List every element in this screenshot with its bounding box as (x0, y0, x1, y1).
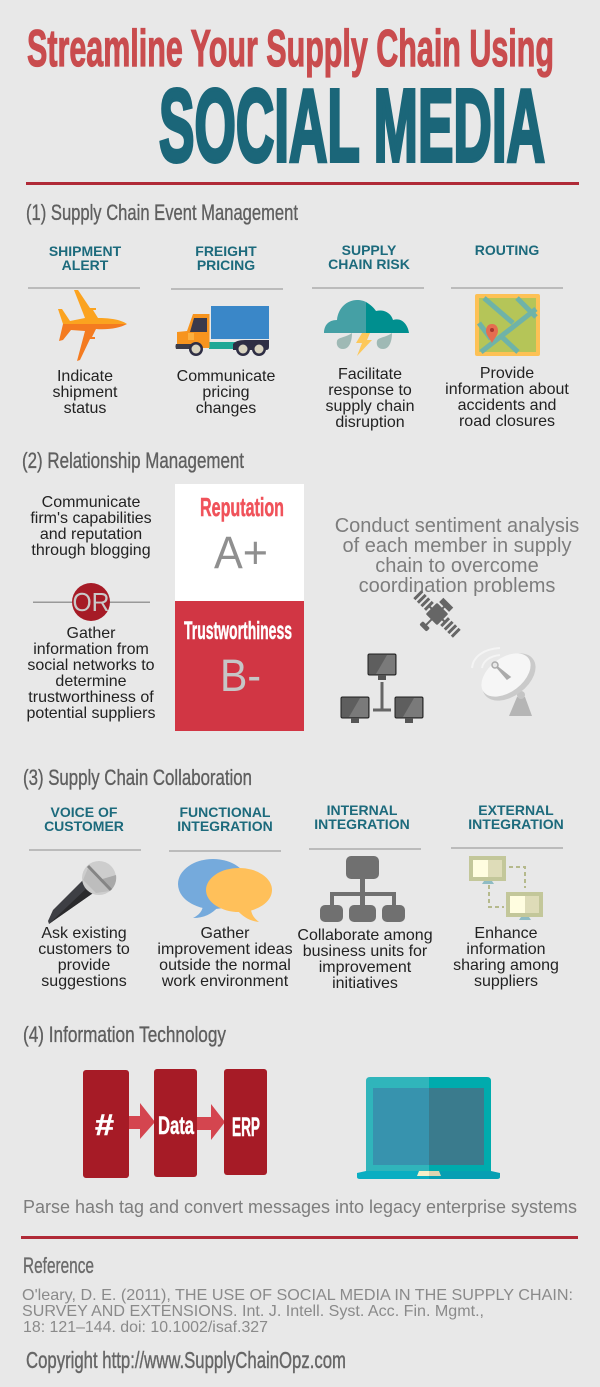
panel: routing: road closures (459, 413, 555, 430)
text block: social networks: determine (55, 673, 127, 690)
panel: internal integration: initiatives (332, 975, 398, 992)
text block: sentiment analysis (335, 515, 579, 597)
panel: internal integration: Collaborate among (297, 927, 433, 944)
text block: social networks: social networks to (27, 657, 155, 674)
panel: shipment alert: Indicate (57, 368, 113, 385)
icon: satellite (403, 583, 468, 648)
panel: shipment alert: ALERT (62, 257, 109, 273)
panel: freight pricing: pricing (202, 384, 250, 401)
panel: voice of customer: CUSTOMER (44, 818, 124, 834)
reference heading: Reference (23, 1253, 94, 1278)
text block: sentiment analysis: of each member in supply (342, 535, 572, 557)
panel: internal integration: improvement (319, 959, 412, 976)
OR divider: OR (72, 587, 110, 617)
panel: external integration: Enhance (474, 925, 538, 942)
text block: parse hash tag: Parse hash tag and convert messages into legacy enterprise systems (23, 1197, 577, 1217)
panel: routing: ROUTING (475, 242, 539, 258)
reference text: SURVEY AND EXTENSIONS. Int. J. Intell. Syst. Acc. Fin. Mgmt., (22, 1303, 484, 1320)
OR divider (33, 583, 150, 621)
text block: blogging: and reputation (40, 526, 142, 543)
text block: sentiment analysis: coordination problems (359, 575, 555, 597)
reference text: O'leary, D. E. (2011), THE USE OF SOCIAL MEDIA IN THE SUPPLY CHAIN: (22, 1287, 573, 1304)
icon: truck (176, 306, 269, 356)
panel: freight pricing (171, 243, 283, 417)
panel: routing: Provide (480, 365, 534, 382)
panel: external integration: information (466, 941, 546, 958)
text block: social networks: information from (33, 641, 149, 658)
panel: functional integration: outside the normal (159, 957, 291, 974)
panel: reputation: A+ (214, 527, 268, 578)
panel: internal integration: INTEGRATION (314, 816, 410, 832)
panel: shipment alert: status (64, 400, 106, 417)
text block: sentiment analysis: Conduct sentiment analysis (335, 515, 579, 537)
flow diagram: hash tag to ERP: Data (158, 1112, 195, 1140)
panel: freight pricing: PRICING (197, 257, 255, 273)
text block: blogging: through blogging (31, 542, 151, 559)
panel: voice of customer: suggestions (41, 973, 127, 990)
panel: functional integration: improvement ideas (157, 941, 293, 958)
flow diagram: hash tag to ERP: # (95, 1109, 114, 1142)
text block: blogging (30, 494, 152, 559)
panel: functional integration: Gather (201, 925, 250, 942)
arrow: hash to data (129, 1103, 155, 1139)
flow diagram: hash tag to ERP (83, 1069, 267, 1178)
panel: shipment alert (28, 243, 140, 417)
panel: reputation (175, 484, 304, 601)
panel: supply chain risk: supply chain (326, 398, 414, 415)
panel: supply chain risk: Facilitate (338, 366, 402, 383)
panel: external integration: suppliers (474, 973, 538, 990)
text block: blogging: firm's capabilities (30, 510, 152, 527)
text block: social networks: potential suppliers (27, 705, 155, 722)
panel: freight pricing: changes (196, 400, 256, 417)
panel: functional integration: work environment (161, 973, 289, 990)
panel: functional integration (157, 804, 293, 990)
panel: external integration: sharing among (453, 957, 559, 974)
panel: voice of customer (29, 804, 141, 990)
panel: voice of customer: provide (58, 957, 110, 974)
panel: internal integration: INTERNAL (327, 802, 398, 818)
panel: shipment alert: shipment (53, 384, 118, 401)
panel: reputation: Reputation (200, 492, 284, 522)
icon: satellite dish (472, 644, 544, 716)
icon: map (475, 294, 540, 356)
panel: voice of customer: VOICE OF (51, 804, 118, 820)
section heading 3: (3) Supply Chain Collaboration (23, 765, 252, 790)
arrow: data to ERP (197, 1104, 225, 1140)
reference text: 18: 121–144. doi: 10.1002/isaf.327 (23, 1319, 268, 1336)
panel: trustworthiness (175, 601, 304, 731)
title (27, 20, 554, 183)
panel: routing: information about (445, 381, 569, 398)
panel: external integration: EXTERNAL (478, 802, 554, 818)
panel: supply chain risk: response to (328, 382, 412, 399)
panel: voice of customer: customers to (38, 941, 130, 958)
panel: routing (445, 242, 569, 430)
panel: supply chain risk: CHAIN RISK (328, 256, 410, 272)
text block: social networks: Gather (67, 625, 116, 642)
section heading 2: (2) Relationship Management (22, 448, 244, 473)
text block: social networks (27, 625, 155, 722)
panel: external integration: INTEGRATION (468, 816, 564, 832)
flow diagram: hash tag to ERP: ERP (232, 1112, 260, 1142)
panel: shipment alert: SHIPMENT (49, 243, 122, 259)
panel: freight pricing: FREIGHT (195, 243, 257, 259)
reference text (22, 1287, 573, 1336)
icon: storm cloud (324, 300, 409, 356)
panel: routing: accidents and (458, 397, 556, 414)
icon: speech bubbles (178, 859, 272, 922)
text block: sentiment analysis: chain to overcome (375, 555, 539, 577)
section heading 4: (4) Information Technology (23, 1022, 226, 1047)
copyright: Copyright http://www.SupplyChainOpz.com (26, 1347, 346, 1373)
panel: voice of customer: Ask existing (41, 925, 127, 942)
icon: airplane (58, 290, 127, 361)
text block: social networks: trustworthiness of (28, 689, 154, 706)
text block: blogging: Communicate (42, 494, 140, 511)
icon: computer network (341, 654, 423, 723)
panel: external integration (451, 802, 564, 990)
panel: internal integration: business units for (303, 943, 428, 960)
panel: supply chain risk: SUPPLY (342, 242, 397, 258)
icon: microphone (48, 861, 116, 924)
panel: functional integration: FUNCTIONAL (180, 804, 271, 820)
panel: trustworthiness: B- (220, 650, 261, 701)
panel: supply chain risk (312, 242, 424, 431)
panel: functional integration: INTEGRATION (177, 818, 273, 834)
icon: linked monitors (469, 856, 543, 920)
panel: trustworthiness: Trustworthiness (184, 617, 292, 645)
section heading 1: (1) Supply Chain Event Management (26, 200, 298, 225)
icon: laptop (357, 1077, 500, 1179)
icon: org chart (320, 856, 405, 922)
panel: supply chain risk: disruption (335, 414, 405, 431)
panel: freight pricing: Communicate (177, 368, 275, 385)
panel: internal integration (297, 802, 433, 992)
